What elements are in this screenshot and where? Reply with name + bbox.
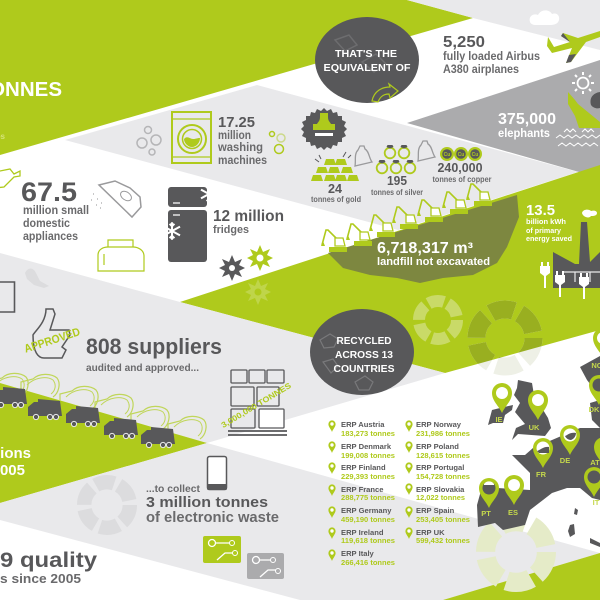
badge: that's the equivalent of <box>315 17 419 103</box>
stat: washing machines: 17.25 <box>218 114 255 131</box>
stat: silver: 195 <box>387 174 407 188</box>
stat: electronic waste: of electronic waste <box>146 510 279 526</box>
list: tonnes by country: 288,775 tonnes <box>341 493 395 502</box>
list: tonnes by country: ERP Austria <box>341 420 385 429</box>
icon: elephant with sun and water <box>556 72 600 146</box>
stat: washing machines <box>217 114 267 167</box>
badge: that's the equivalent of: EQUIVALENT OF <box>324 62 411 74</box>
list: tonnes by country: 231,986 tonnes <box>416 429 470 438</box>
stat: suppliers <box>86 334 222 374</box>
stat: electronic waste <box>146 483 279 526</box>
list: tonnes by country: 154,728 tonnes <box>416 472 470 481</box>
badge: recycled across 13 countries: ACROSS 13 <box>335 349 393 361</box>
icons: recycling on green <box>419 301 534 366</box>
list: tonnes by country: 199,008 tonnes <box>341 451 395 460</box>
icons: gears <box>219 245 273 305</box>
stat: electronic waste: ...to collect <box>146 483 200 495</box>
map pins: IT <box>593 498 600 507</box>
badge: recycled across 13 countries <box>310 309 414 395</box>
stat: small domestic appliances: million small <box>23 203 89 217</box>
icon: spray <box>0 169 20 188</box>
map pins <box>479 328 600 518</box>
list: tonnes by country: 119,618 tonnes <box>341 536 395 545</box>
icon: copper coins: Cu <box>444 152 450 158</box>
icon: circuit green <box>203 536 241 563</box>
badge: recycled across 13 countries: COUNTRIES <box>334 363 394 375</box>
list: tonnes by country: ERP Italy <box>341 549 375 558</box>
list: tonnes by country: 12,022 tonnes <box>416 493 465 502</box>
list: tonnes by country: ERP France <box>341 485 384 494</box>
icon: factory and plugs <box>540 210 600 299</box>
list: tonnes by country: ERP Germany <box>341 506 392 515</box>
icon: smartphone <box>207 456 227 490</box>
stat: landfill <box>377 240 490 268</box>
stat: suppliers: 808 suppliers <box>86 334 222 359</box>
map pins: DE <box>560 456 570 465</box>
map of Europe <box>477 356 600 547</box>
stat: energy saved: 13.5 <box>526 202 555 219</box>
stat: washing machines: million <box>218 130 251 142</box>
icon: gold bars <box>311 152 359 181</box>
list: tonnes by country: 128,615 tonnes <box>416 451 470 460</box>
stat: fridges: 12 million <box>213 208 284 225</box>
stat: small domestic appliances <box>21 177 89 243</box>
icon: silver rings <box>377 145 415 173</box>
list: tonnes by country: ERP Slovakia <box>416 485 465 494</box>
stat: suppliers: audited and approved... <box>86 362 199 374</box>
stat: airplanes: 5,250 <box>443 34 485 51</box>
stat: energy saved: energy saved <box>526 234 572 243</box>
stat: electronic waste: 3 million tonnes <box>146 495 268 511</box>
badge: that's the equivalent of: THAT'S THE <box>335 48 397 60</box>
list: tonnes by country: ERP Denmark <box>341 442 392 451</box>
map pins: ES <box>508 508 518 517</box>
icon: stamp badge <box>301 108 347 150</box>
icon: copper coins: Cu <box>472 152 478 158</box>
icon: thumbs up approved <box>23 309 82 358</box>
list: tonnes by country: ERP UK <box>416 528 445 537</box>
icons: excavators <box>321 184 492 252</box>
icon: pale recycling behind map <box>486 522 546 582</box>
list: tonnes by country: 599,432 tonnes <box>416 536 470 545</box>
stat: landfill: 6,718,317 m³ <box>377 240 473 257</box>
icon: airplane <box>547 31 600 63</box>
icon: thumbs up approved: APPROVED <box>23 326 82 356</box>
icon: faded recycling <box>84 482 130 528</box>
stat: gold <box>311 182 361 204</box>
map pins: IE <box>495 415 503 424</box>
stat: collections: 005 <box>0 462 25 479</box>
stat: quality audits: 9 quality <box>0 549 97 572</box>
stat: silver: tonnes of silver <box>371 187 424 197</box>
stat: elephants: 375,000 <box>498 111 556 128</box>
stat: copper <box>432 161 492 184</box>
icon: iron <box>91 181 141 217</box>
stat: copper: tonnes of copper <box>432 174 492 184</box>
icon: copper coins: Cu <box>458 152 464 158</box>
stat: quality audits: s since 2005 <box>0 571 81 586</box>
icon: pallet of boxes <box>220 370 293 435</box>
badge: recycled across 13 countries: RECYCLED <box>336 335 392 347</box>
list: tonnes by country: ERP Spain <box>416 506 455 515</box>
stat: quality audits <box>0 549 97 586</box>
list: tonnes by country: 229,393 tonnes <box>341 472 395 481</box>
icons: trucks <box>0 387 175 448</box>
stat: washing machines: machines <box>218 155 267 167</box>
stat: small domestic appliances: appliances <box>23 229 78 243</box>
stat: washing machines: washing <box>217 142 263 154</box>
icon: washing machine <box>172 112 211 163</box>
icons: truck trails <box>0 373 206 439</box>
stat: gold: 24 <box>328 182 342 196</box>
list: tonnes by country: ERP Ireland <box>341 528 384 537</box>
list: tonnes by country: ERP Portugal <box>416 463 464 472</box>
stat: copper: 240,000 <box>438 161 483 175</box>
map pins: UK <box>529 423 540 432</box>
stat: fridges <box>213 208 284 236</box>
stat: gold: tonnes of gold <box>311 194 361 204</box>
list: tonnes by country: ERP Finland <box>341 463 386 472</box>
list: tonnes by country: 253,405 tonnes <box>416 515 470 524</box>
icon: fridge <box>164 185 217 262</box>
icon: circuit grey <box>247 553 284 579</box>
stat: small domestic appliances: 67.5 <box>21 177 77 207</box>
icon: bubbles grey <box>137 126 161 155</box>
map pins: DK <box>589 405 600 414</box>
map pins: FR <box>536 470 547 479</box>
stat: energy saved: of primary <box>526 226 562 235</box>
list: tonnes by country: 266,416 tonnes <box>341 558 395 567</box>
heading: tonnes <box>0 78 62 141</box>
icon: toaster <box>98 240 144 271</box>
icon: weight right <box>418 141 435 161</box>
stat: elephants: elephants <box>498 126 550 140</box>
icon: cloud <box>530 10 559 25</box>
list: tonnes by country: ERP Norway <box>416 420 462 429</box>
stat: fridges: fridges <box>213 224 249 236</box>
icon: faded plug <box>25 268 49 288</box>
stat: landfill: landfill not excavated <box>377 256 490 268</box>
stat: collections <box>0 445 31 479</box>
stat: airplanes: A380 airplanes <box>443 64 519 76</box>
list: tonnes by country <box>328 420 470 567</box>
stat: silver <box>371 174 424 197</box>
landfill shape <box>328 195 519 283</box>
icon: tablet <box>0 282 14 312</box>
stat: energy saved <box>526 202 572 243</box>
list: tonnes by country: 459,190 tonnes <box>341 515 395 524</box>
icon: copper coins <box>440 147 482 161</box>
stat: collections: ions <box>0 445 31 462</box>
stat: small domestic appliances: domestic <box>23 216 70 230</box>
icon: weight left <box>355 146 372 166</box>
map pins: AT <box>590 458 600 467</box>
icon: bubbles green <box>270 132 285 154</box>
list: tonnes by country: ERP Poland <box>416 442 459 451</box>
icon: pallet of boxes: 3,000,000 TONNES <box>220 381 293 430</box>
stat: airplanes: fully loaded Airbus <box>443 51 540 63</box>
stat: elephants <box>498 111 556 140</box>
list: tonnes by country: 183,273 tonnes <box>341 429 395 438</box>
stat: airplanes <box>443 34 540 76</box>
stat: energy saved: billion kWh <box>526 217 566 226</box>
map pins: PT <box>481 509 491 518</box>
